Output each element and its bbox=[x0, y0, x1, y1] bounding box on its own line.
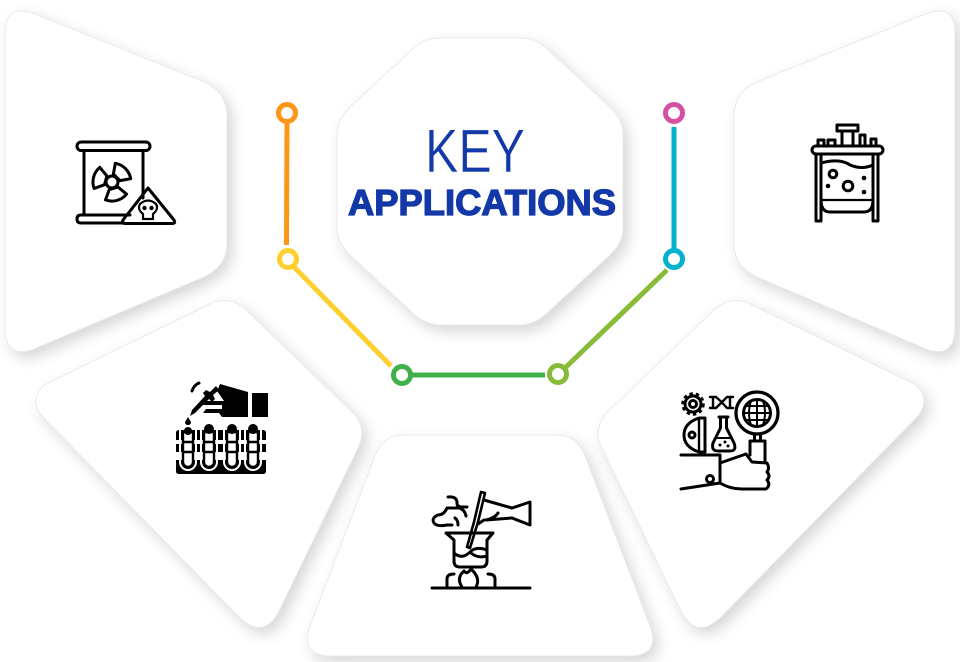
title bbox=[348, 117, 616, 223]
gear bbox=[690, 400, 696, 408]
dropper bbox=[190, 386, 219, 416]
panel: top right bbox=[734, 11, 955, 352]
tube outer gaps bbox=[180, 426, 261, 470]
title line: KEY: KEY bbox=[425, 117, 525, 185]
node: lime bbox=[550, 366, 566, 382]
spray arc bbox=[192, 383, 199, 391]
node: yellow bbox=[280, 250, 296, 268]
segment: cyan bbox=[672, 127, 676, 252]
protractor bbox=[684, 418, 705, 452]
tube rack bbox=[176, 424, 266, 474]
panel: top left bbox=[5, 11, 227, 352]
icon: hand with magnifier and science symbols bbox=[681, 392, 778, 489]
panel: lower left bbox=[36, 301, 362, 627]
hand bbox=[681, 455, 720, 489]
rack bands bbox=[176, 430, 266, 474]
node: cyan bbox=[666, 250, 682, 268]
icon: hand with dropper over test tubes bbox=[176, 383, 268, 474]
icon: radioactive barrel with skull warning bbox=[77, 142, 175, 224]
panel: lower right bbox=[598, 301, 924, 627]
magnifier bbox=[736, 392, 778, 434]
panel: center octagon bbox=[337, 38, 623, 325]
cuff bbox=[252, 393, 268, 417]
segment: green bbox=[411, 372, 545, 378]
connector path bbox=[278, 104, 682, 384]
tube bands bbox=[183, 442, 258, 452]
icon: hand stirring pot over flame bbox=[432, 492, 530, 588]
panel: bottom bbox=[307, 435, 653, 656]
node: orange bbox=[278, 104, 296, 122]
node: green bbox=[394, 366, 410, 384]
segment: orange bbox=[284, 122, 290, 245]
title line: APPLICATIONS: APPLICATIONS bbox=[348, 182, 616, 223]
flask bbox=[713, 417, 735, 451]
glove hand bbox=[203, 384, 248, 417]
segment: lime bbox=[566, 270, 667, 367]
dna bbox=[710, 397, 733, 408]
tube bodies bbox=[183, 432, 258, 467]
node: magenta bbox=[666, 104, 682, 122]
icon: reactor vessel bbox=[812, 125, 883, 221]
drop bbox=[185, 417, 191, 425]
segment: yellow bbox=[293, 266, 391, 366]
